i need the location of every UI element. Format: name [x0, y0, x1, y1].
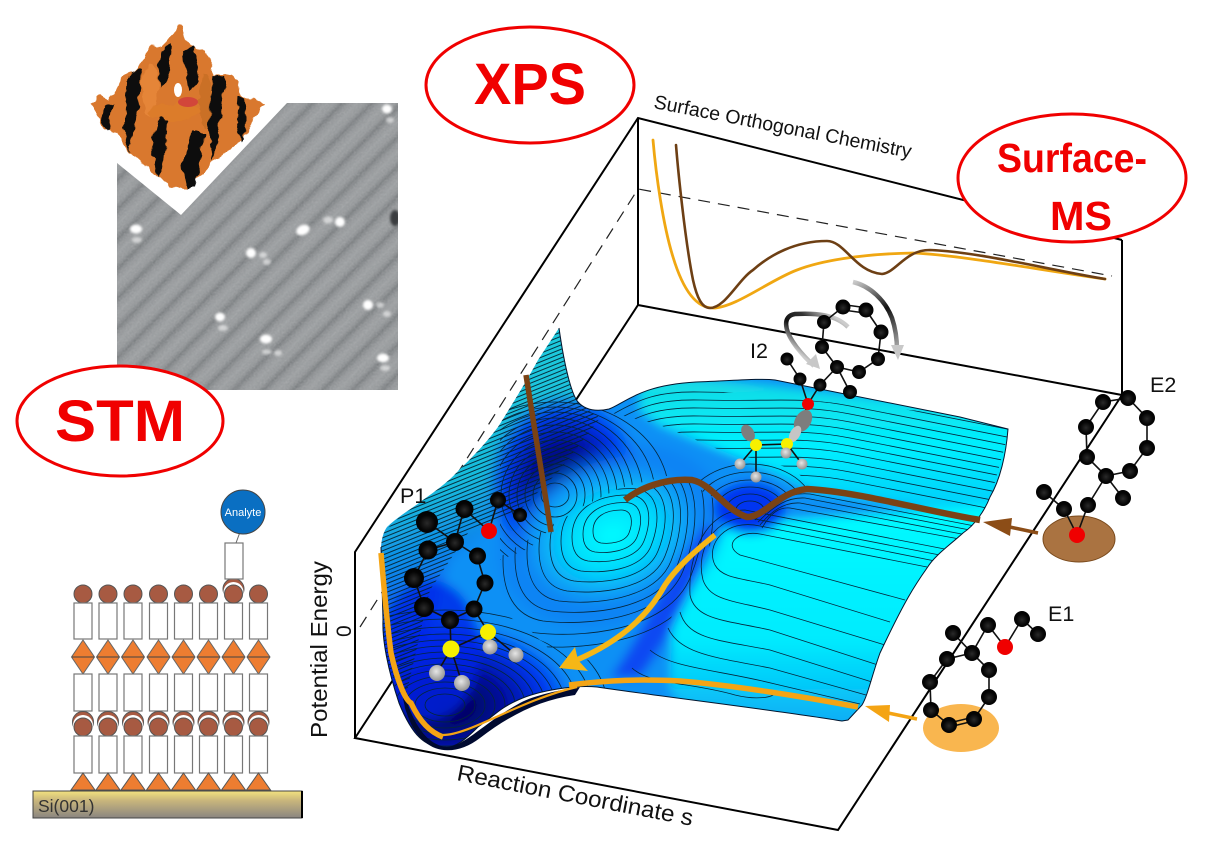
rotation arrow right: [853, 282, 904, 360]
Surface-MS callout: [958, 114, 1186, 242]
state label I2: I2: [750, 339, 768, 363]
molecule E1 on orange ellipse: [922, 611, 1046, 752]
layer columns: [71, 585, 270, 790]
y axis zero tick: 0: [333, 625, 356, 637]
STM callout: STM: [55, 389, 185, 454]
contours: front plateau: [632, 494, 985, 704]
self-assembled multilayer schematic: [33, 490, 302, 818]
analyte bead: Analyte: [225, 507, 261, 519]
XPS callout: XPS: [474, 52, 586, 117]
molecule P1: [404, 492, 527, 691]
plot title: surface orthogonal chemistry: Surface Orthogonal Chemistry: [652, 91, 914, 163]
Surface-MS callout: MS: [1050, 193, 1112, 239]
STM micrograph: [117, 103, 400, 390]
contours: product well: [390, 610, 605, 746]
y axis label: Potential Energy: [306, 560, 332, 738]
rotation arrow left: [786, 314, 848, 369]
STM callout: [17, 366, 223, 476]
potential energy surface: [381, 328, 1008, 747]
surface colour field: [381, 328, 1008, 747]
surface outline: [381, 328, 1008, 747]
molecule E2 on brown ellipse: [1036, 390, 1155, 562]
orange adsorption site: [923, 704, 999, 752]
brown entrance arrow: [983, 518, 1038, 536]
contours: back valley: [500, 402, 667, 560]
back-wall energy curves: [653, 140, 1105, 308]
x axis label: Reaction Coordinate s: [455, 759, 696, 831]
yellow direction arrow on surface: [559, 535, 715, 671]
molecule I2 with rotation arrows: [734, 282, 904, 482]
analyte tether: [223, 532, 244, 603]
state label P1: P1: [400, 484, 426, 508]
state label E2: E2: [1150, 373, 1176, 397]
3D STM inset: [90, 25, 265, 190]
bright adsorbates: [130, 104, 394, 371]
dense contours on the left slope: [375, 328, 600, 700]
dark lower rim of product well: [401, 680, 580, 750]
contours: central hill: [502, 483, 714, 648]
contours: intermediate well: [701, 464, 805, 508]
contours: back plateau band: [610, 392, 1012, 513]
Surface-MS callout: Surface-: [997, 135, 1147, 181]
silicon substrate: Si(001): [38, 796, 94, 816]
silicon substrate: [33, 791, 302, 818]
brown adsorption site: [1043, 516, 1115, 562]
brown reaction path: [526, 375, 980, 532]
analyte bead: [221, 490, 265, 534]
orange reaction path: [381, 553, 858, 737]
orange entrance arrow: [865, 705, 917, 722]
XPS callout: [426, 27, 634, 143]
state label E1: E1: [1048, 602, 1074, 626]
3D axes box: [355, 118, 1122, 830]
